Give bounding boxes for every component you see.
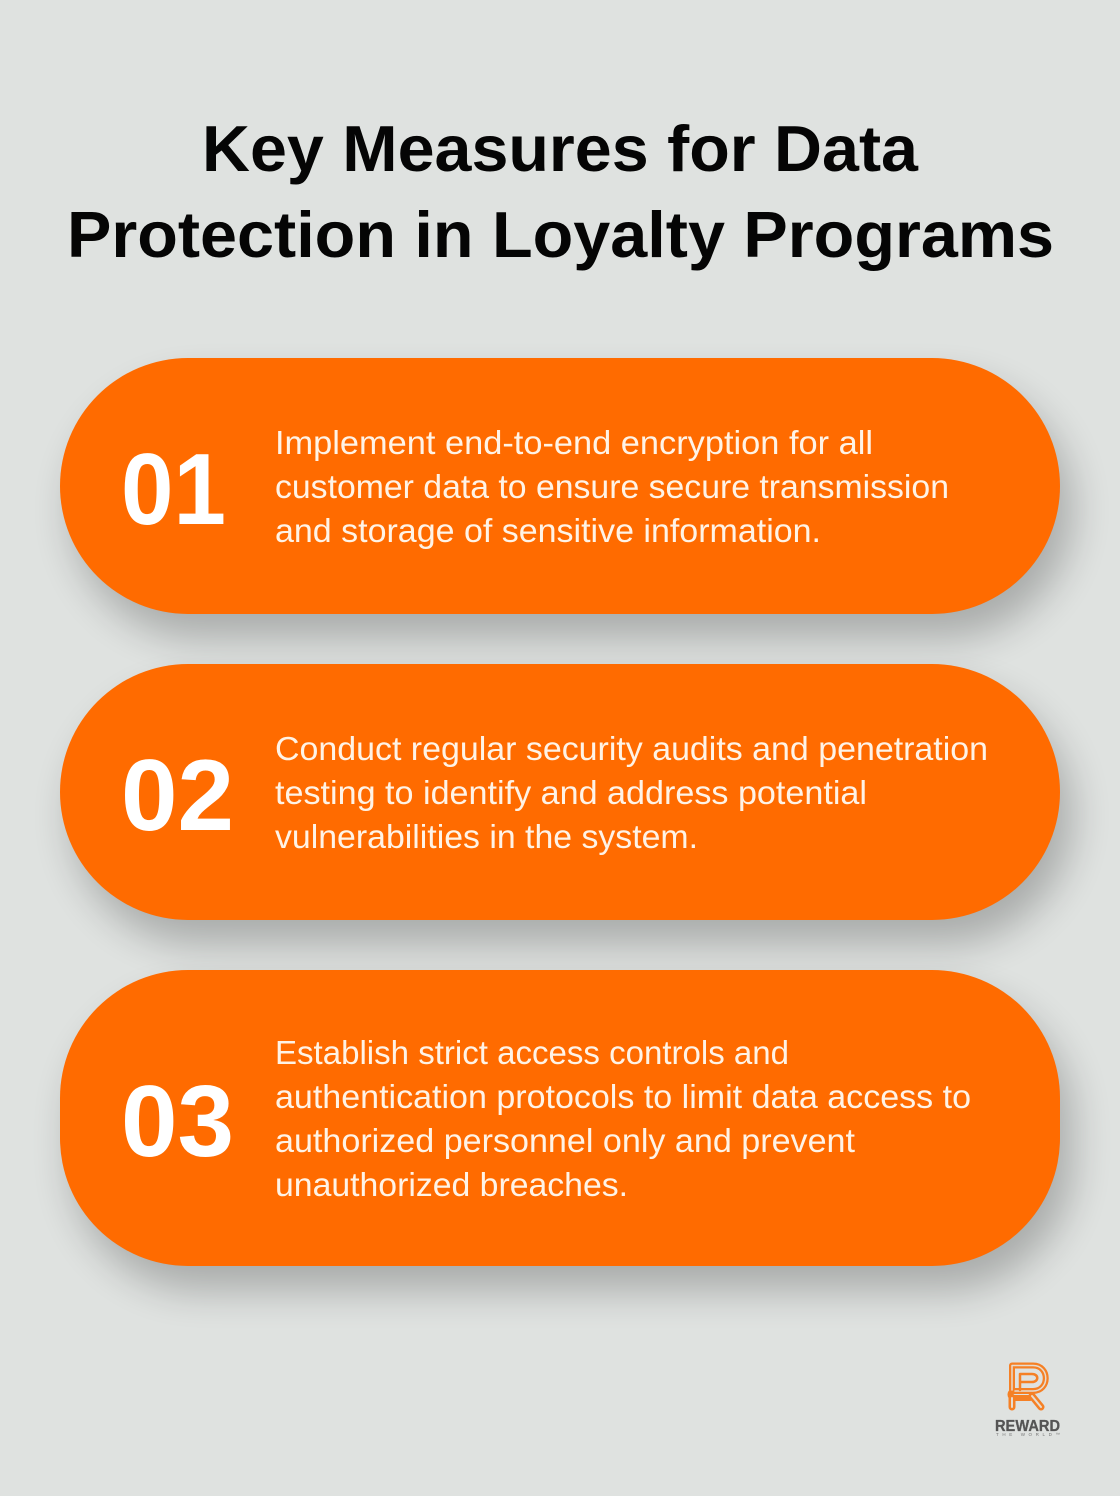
text: step 03 description (275, 1034, 971, 1203)
text: step 02 description: vulnerabilities in the system. (275, 818, 698, 855)
number 02: 02 (121, 740, 234, 852)
panel: step 02 (60, 664, 1072, 944)
text: step 01 description: and storage of sensitive information. (275, 512, 821, 549)
title: Key Measures for Data (202, 112, 919, 185)
text: step 03 description: Establish strict access controls and (275, 1034, 789, 1071)
logo: Reward the World: THE WORLD™ (996, 1432, 1060, 1437)
panel: step 03 (60, 970, 1072, 1290)
number 03: 03 (121, 1066, 234, 1178)
text: step 01 description: customer data to ensure secure transmission (275, 468, 949, 505)
number 01: 01 (121, 434, 226, 546)
text: step 03 description: authentication protocols to limit data access to (275, 1078, 971, 1115)
text: step 03 description: authorized personnel only and prevent (275, 1122, 855, 1159)
logo: Reward the World: REWARD (995, 1418, 1060, 1435)
text: step 01 description: Implement end-to-end encryption for all (275, 424, 873, 461)
text: step 03 description: unauthorized breaches. (275, 1166, 628, 1203)
logo: Reward the World (995, 1366, 1060, 1437)
title (67, 112, 1054, 271)
text: step 02 description (275, 730, 988, 855)
panel: step 01 (60, 358, 1072, 638)
text: step 02 description: Conduct regular security audits and penetration (275, 730, 988, 767)
title: Protection in Loyalty Programs (67, 198, 1054, 271)
icon: stylised R (1010, 1366, 1046, 1407)
text: step 01 description (275, 424, 949, 549)
text: step 02 description: testing to identify and address potential (275, 774, 867, 811)
